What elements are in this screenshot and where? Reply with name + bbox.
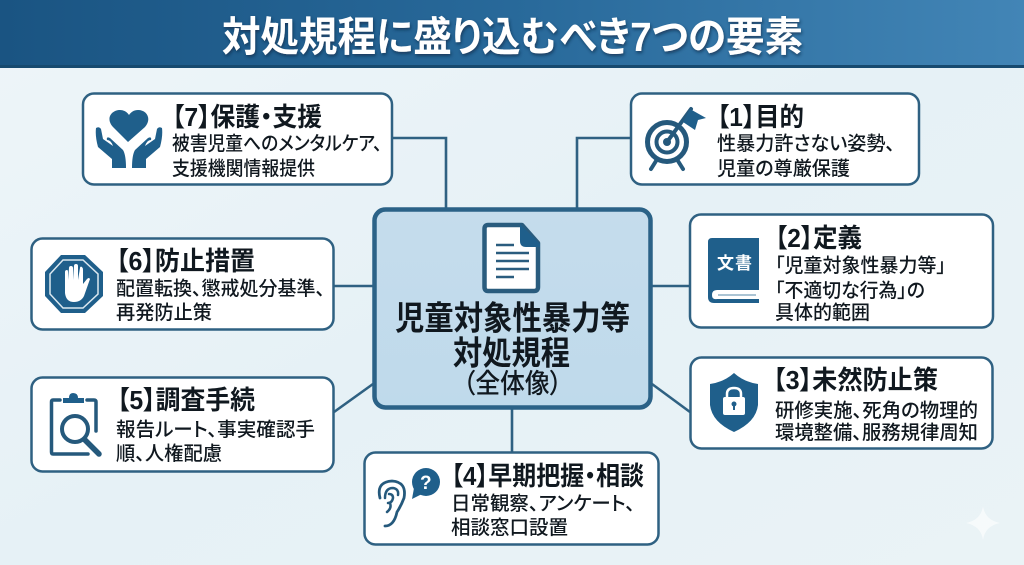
icon: heart in hands	[96, 110, 162, 168]
text: 6 body: 再発防止策	[116, 302, 212, 324]
text: 1 body	[717, 133, 895, 180]
text: 3 heading: 【3】未然防止策	[773, 365, 938, 395]
text: 5 body: 順、人権配慮	[116, 443, 222, 465]
icon: book: 文書	[717, 253, 752, 273]
text: 5 body	[116, 419, 315, 465]
text: 2 body: 「児童対象性暴力等」	[775, 255, 946, 277]
text: 2 body: 具体的範囲	[775, 302, 870, 324]
panel: 4 early detection and consultation	[364, 452, 658, 544]
text: 7 body	[172, 133, 382, 180]
center heading: （全体像）	[463, 369, 562, 399]
icon: ear with question bubble	[379, 468, 440, 526]
connector lines	[334, 138, 690, 452]
text: 6 body: 配置転換、懲戒処分基準、	[116, 278, 325, 300]
text: 5 heading: 【5】調査手続	[117, 385, 255, 415]
text: 6 body	[116, 278, 325, 324]
text: 1 body: 性暴力許さない姿勢、	[717, 133, 895, 155]
text: 4 heading: 【4】早期把握・相談	[451, 461, 644, 491]
center heading: 児童対象性暴力等	[395, 300, 630, 336]
icon: sparkle watermark	[966, 506, 1000, 540]
header band	[0, 0, 1024, 68]
text: 4 body: 日常観察、アンケート、	[451, 493, 635, 515]
panel: 3 proactive prevention	[690, 358, 992, 448]
icon: book	[708, 238, 759, 303]
text: 2 body: 「不適切な行為」の	[775, 280, 925, 302]
text: 1 body: 児童の尊厳保護	[717, 158, 850, 180]
icon: clipboard with magnifier	[52, 393, 99, 454]
icon: target with flag	[648, 109, 706, 169]
panel: 6 prevention measures	[32, 238, 334, 330]
text: 7 body: 被害児童へのメンタルケア、	[172, 133, 382, 155]
icon: document	[484, 224, 540, 291]
panel: 7 protection and support	[83, 94, 392, 184]
title: 対処規程に盛り込むべき7つの要素	[222, 14, 803, 60]
center heading: 対処規程	[453, 334, 570, 372]
text: 7 body: 支援機関情報提供	[172, 158, 315, 180]
text: 2 heading: 【2】定義	[775, 223, 862, 253]
text: 4 body: 相談窓口設置	[451, 517, 568, 539]
text: 2 body	[775, 255, 946, 324]
text: 5 body: 報告ルート、事実確認手	[116, 419, 315, 441]
text: 4 body	[451, 493, 635, 539]
icon: ear with question bubble: ?	[420, 473, 432, 494]
panel: 1 purpose	[631, 94, 919, 184]
panel: 2 definition	[690, 214, 993, 328]
text: 3 body: 環境整備、服務規律周知	[775, 422, 978, 444]
panel: 5 investigation procedure	[32, 378, 334, 472]
center heading	[395, 300, 630, 399]
text: 3 body: 研修実施、死角の物理的	[775, 400, 978, 422]
text: 1 heading: 【1】目的	[717, 102, 804, 132]
text: 3 body	[775, 400, 978, 444]
panel: center	[374, 210, 650, 408]
text: 6 heading: 【6】防止措置	[116, 246, 255, 276]
text: 7 heading: 【7】保護・支援	[172, 102, 322, 132]
icon: shield with lock	[710, 373, 758, 432]
icon: stop hand	[45, 255, 103, 313]
